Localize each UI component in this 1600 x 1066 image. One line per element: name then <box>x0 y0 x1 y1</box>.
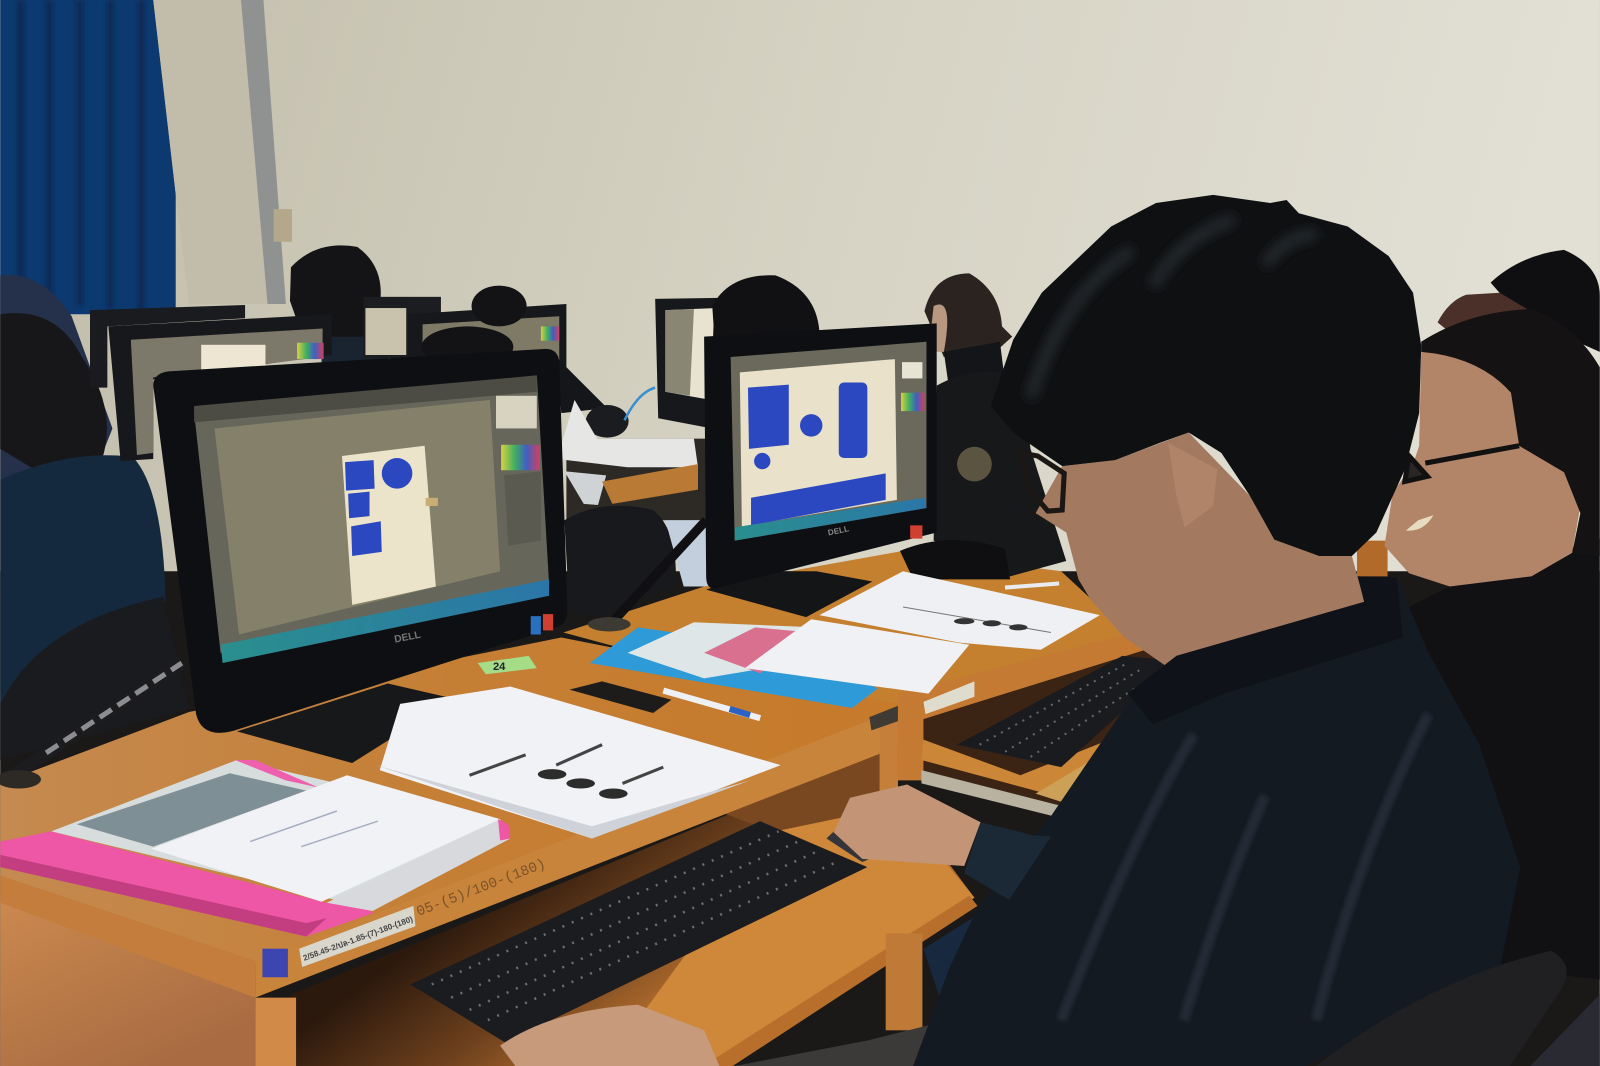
trousers <box>735 1025 929 1066</box>
hand on mouse <box>834 784 981 866</box>
phone <box>569 681 671 713</box>
back wall <box>0 0 1600 592</box>
blue folder with papers <box>590 619 969 708</box>
monitor stand right <box>706 571 872 617</box>
rear monitor right <box>625 298 718 428</box>
teeth <box>1406 515 1433 531</box>
foreground student <box>500 195 1520 1066</box>
rear monitor centre with screen <box>363 297 566 408</box>
worksheet stack right <box>819 571 1100 650</box>
rear student centre left <box>290 245 388 367</box>
small label strip right desk <box>923 681 974 714</box>
right desk surface <box>563 551 1133 714</box>
jeans <box>923 898 1005 1020</box>
cuff <box>964 822 1051 900</box>
blue pen on right desk <box>1005 583 1059 588</box>
collar <box>1127 576 1403 724</box>
black backpack <box>900 371 1066 579</box>
lower hand on keyboard <box>500 1005 719 1066</box>
face <box>1385 347 1581 587</box>
curtain <box>0 0 176 314</box>
wall pillar and conduit <box>153 0 292 304</box>
rear desk shadow <box>566 439 709 520</box>
monitor right: blue shapes: DELL <box>827 524 850 538</box>
neck and face <box>1036 433 1367 673</box>
pink zip folder <box>0 760 510 936</box>
right smiling man <box>1357 309 1600 979</box>
rear papers <box>557 400 698 505</box>
rear monitor left <box>108 314 332 461</box>
handwritten desk marking: 05-(5)/100-(180) <box>415 857 548 921</box>
shirt folds <box>1061 714 1428 1020</box>
pen <box>663 691 760 718</box>
chair left <box>0 597 189 760</box>
rear students heads <box>422 286 629 438</box>
label strip on desk: 2/58.45-2/ปล-1.85-(7)-180-(180) <box>302 914 414 963</box>
number tag 24: 24 <box>493 661 506 673</box>
main desk surface <box>0 638 898 964</box>
mouse <box>827 813 900 862</box>
artboard <box>342 446 436 605</box>
chair back centre <box>564 506 709 617</box>
hair <box>1421 309 1600 556</box>
ear <box>1168 443 1217 527</box>
shirt <box>1405 539 1600 979</box>
shirt body <box>913 577 1520 1066</box>
glasses <box>1405 446 1519 481</box>
microphone gooseneck centre <box>588 520 706 631</box>
main desk front edge and side <box>0 706 898 1066</box>
foreground chair <box>1316 951 1600 1066</box>
monitor main: artboard: DELL <box>393 630 422 646</box>
rear student with ponytail <box>924 273 1012 388</box>
hair <box>991 195 1421 556</box>
rear monitor far left <box>90 305 245 388</box>
monitor main: artboard <box>153 349 567 733</box>
monitor stand main <box>237 683 454 763</box>
right back students hair <box>1438 250 1600 352</box>
right desk front and tray <box>898 632 1184 818</box>
left student, back row <box>0 275 166 704</box>
rear student with short hair <box>712 275 819 337</box>
worksheet stack main <box>376 687 781 839</box>
blue shapes on screen <box>748 383 886 525</box>
microphone gooseneck left <box>0 663 182 789</box>
monitor right: blue shapes <box>704 323 937 589</box>
glasses <box>1021 453 1064 511</box>
dark lower room background <box>0 571 1600 1066</box>
main keyboard <box>410 821 867 1043</box>
second keyboard right <box>957 656 1178 767</box>
main desk tray and cavity <box>291 745 977 1066</box>
number tag 24 <box>478 656 537 674</box>
desk piece behind face <box>1357 541 1388 576</box>
pen tip <box>730 709 750 715</box>
hair highlights <box>1031 219 1316 398</box>
